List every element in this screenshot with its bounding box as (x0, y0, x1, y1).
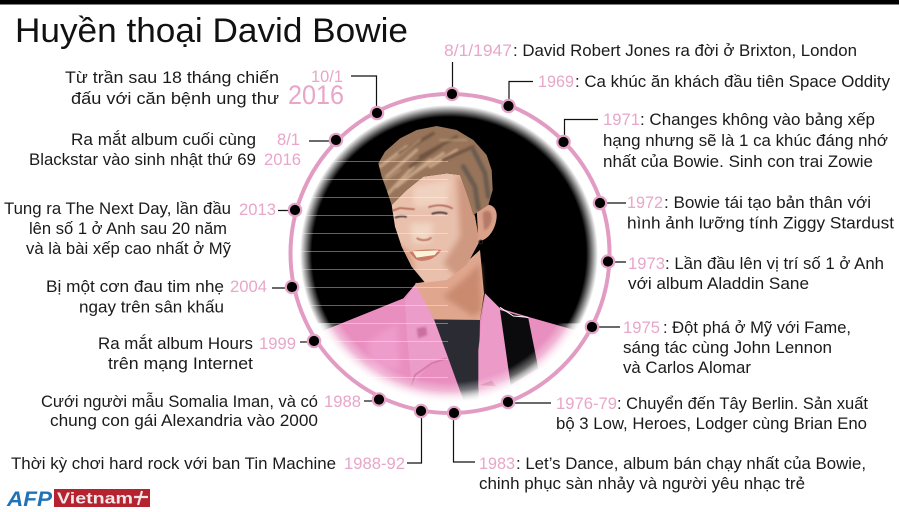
event: 1988: chung con gái Alexandria vào 2000 (50, 411, 318, 430)
event: 1973: với album Aladdin Sane (628, 274, 809, 293)
event: 8/1/1947: : David Robert Jones ra đời ở Brixton, London (513, 41, 857, 60)
event: 1971: : Changes không vào bảng xếp (640, 110, 875, 129)
event: 1975: và Carlos Alomar (623, 358, 751, 377)
event: 1976-79 (502, 394, 868, 433)
event: 1999: 1999 (259, 334, 296, 353)
event: 2004: 2004 (230, 277, 267, 296)
event: 2013 (4, 199, 301, 258)
event: 10/1/2016: đấu với căn bệnh ung thư (71, 89, 279, 108)
event: 1983: chinh phục sàn nhảy và người yêu nhạc trẻ (479, 474, 805, 493)
event: 1973: : Lần đầu lên vị trí số 1 ở Anh (665, 254, 884, 273)
event: 1972: : Bowie tái tạo bản thân với (664, 193, 871, 212)
event: 8/1/2016: Ra mắt album cuối cùng (71, 130, 256, 149)
event: 10/1/2016: 2016 (288, 80, 344, 110)
photo scan lines (300, 162, 448, 378)
event: 1971: hạng nhưng sẽ là 1 ca khúc đáng nhớ (603, 131, 888, 150)
logo: Vietnam+: Vietnam (57, 490, 133, 508)
event: 1971: nhất của Bowie. Sinh con trai Zowie (603, 152, 873, 171)
event: 10/1/2016: 10/1 (311, 67, 343, 86)
event: 1972: 1972 (627, 193, 663, 212)
event: 1969: : Ca khúc ăn khách đầu tiên Space Oddity (575, 72, 890, 91)
event: 1975 (586, 318, 851, 377)
event: 1999: trên mạng Internet (108, 354, 253, 373)
event: 1983: 1983 (479, 454, 515, 473)
event: 1969: 1969 (538, 72, 574, 91)
event: 1988: Cưới người mẫu Somalia Iman, và có (41, 392, 318, 411)
event: 1976-79: : Chuyển đến Tây Berlin. Sản xuất (617, 394, 868, 413)
event: 10/1/2016 (65, 67, 383, 119)
event: 1999 (98, 334, 320, 373)
event: 1972: hình ảnh lưỡng tính Ziggy Stardust (627, 214, 894, 232)
event: 1983: : Let’s Dance, album bán chạy nhất của Bowie, (516, 454, 866, 473)
event: 1973 (602, 254, 884, 293)
event: 1983 (448, 407, 866, 493)
event: 2004: Bị một cơn đau tim nhẹ (46, 277, 224, 296)
event: 2013: 2013 (239, 200, 276, 219)
event: 10/1/2016: Từ trần sau 18 tháng chiến (65, 68, 279, 87)
event: 2004 (46, 277, 298, 316)
event: 1988-92: Thời kỳ chơi hard rock với ban Tin Machine (11, 454, 336, 473)
event: 1976-79: bộ 3 Low, Heroes, Lodger cùng Brian Eno (556, 414, 867, 433)
event: 1999: Ra mắt album Hours (98, 334, 253, 353)
top black bar (0, 0, 899, 4)
event: 1972 (594, 193, 894, 232)
event: 2004: ngay trên sân khấu (79, 298, 224, 316)
event: 8/1/2016: 8/1 (277, 130, 300, 149)
title: Huyền thoại David Bowie (15, 12, 408, 50)
event: 1971: 1971 (603, 110, 640, 129)
event: 1988: 1988 (324, 392, 361, 411)
timeline ring (290, 94, 610, 413)
photo: David Bowie portrait (300, 105, 600, 407)
logo: Vietnam+ (54, 489, 150, 508)
event: 2013: và là bài xếp cao nhất ở Mỹ (26, 239, 231, 258)
logo: AFP: AFP (6, 488, 53, 511)
event: 1969 (502, 72, 890, 112)
event: 1975: sáng tác cùng John Lennon (623, 338, 832, 357)
event: 1988-92: 1988-92 (344, 454, 405, 473)
event: 1988 (41, 392, 385, 430)
event: 8/1/1947: 8/1/1947 (444, 41, 512, 60)
event: 1975: : Đột phá ở Mỹ với Fame, (663, 318, 851, 337)
event: 2013: lên số 1 ở Anh sau 20 năm (29, 219, 227, 238)
event: 1975: 1975 (623, 318, 660, 337)
event: 1973: 1973 (628, 254, 665, 273)
event: 8/1/1947 (444, 41, 857, 100)
event: 8/1/2016: 2016 (264, 150, 301, 169)
event: 1976-79: 1976-79 (556, 394, 617, 413)
event: 2013: Tung ra The Next Day, lần đầu (4, 199, 231, 218)
event: 1988-92 (11, 405, 427, 473)
event: 8/1/2016 (29, 130, 342, 169)
event: 1971 (557, 110, 888, 171)
event: 8/1/2016: Blackstar vào sinh nhật thứ 69 (29, 150, 256, 169)
